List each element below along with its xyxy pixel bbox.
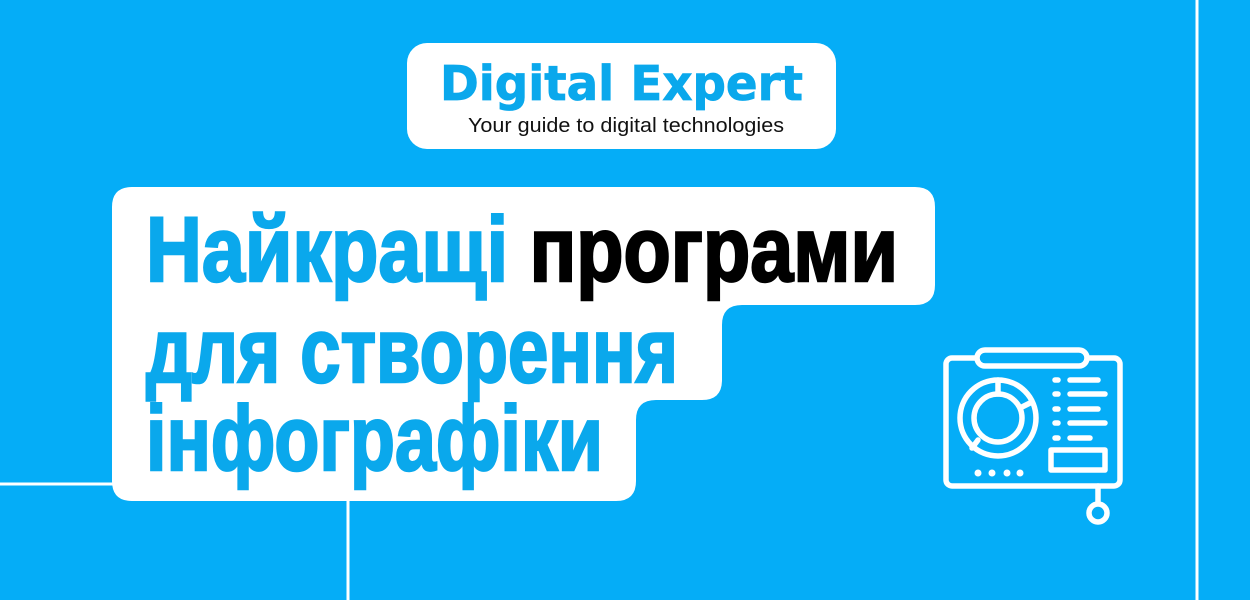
title line 3: інфографіки [146,388,603,490]
title block [112,187,935,501]
icon: dashboard board [946,350,1120,522]
logo box [407,43,836,149]
title line 1: Найкращі програми [146,199,898,301]
title line 2: для створення [146,300,678,402]
logo title: Digital Expert [440,56,803,112]
logo subtitle: Your guide to digital technologies [468,115,784,137]
